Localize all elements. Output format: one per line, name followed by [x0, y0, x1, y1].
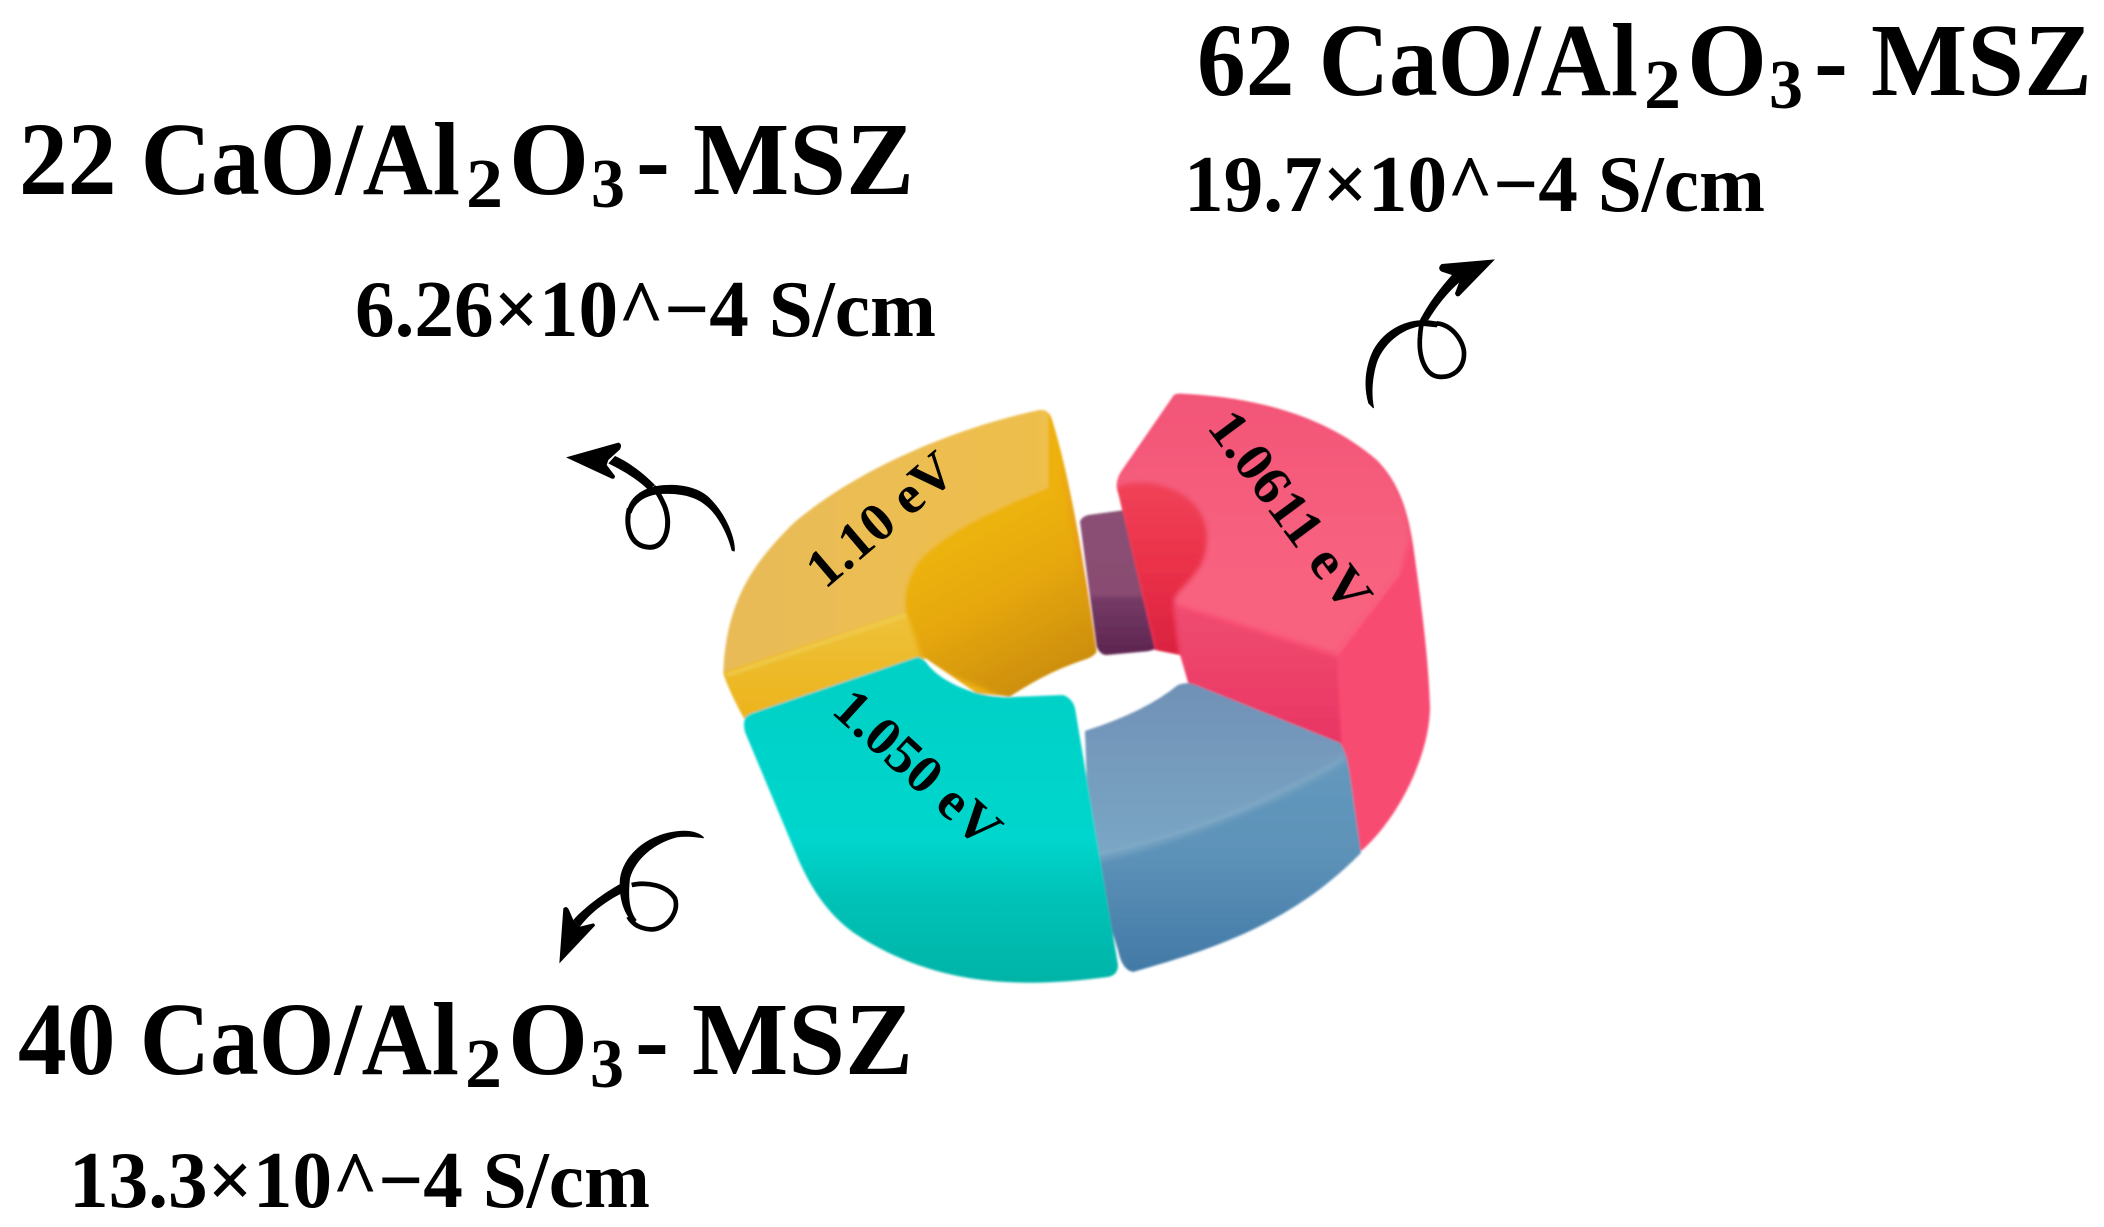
conductivity value: 62 CaO/Al2O3 - MSZ: 19.7×10^−4 S/cm — [1184, 141, 1765, 229]
heading: 22 CaO/Al2O3 - MSZ: 3 — [591, 146, 625, 223]
heading: 40 CaO/Al2O3 - MSZ: 3 — [590, 1026, 624, 1103]
heading: 22 CaO/Al2O3 - MSZ: O — [509, 102, 589, 217]
heading: 62 CaO/Al2O3 - MSZ: O — [1687, 3, 1767, 118]
conductivity value: 40 CaO/Al2O3 - MSZ: 13.3×10^−4 S/cm — [69, 1137, 650, 1225]
label: 1.10 eV: 1.10 eV — [794, 439, 967, 599]
heading: 62 CaO/Al2O3 - MSZ: - — [1814, 3, 1848, 118]
label: 1.050 eV: 1.050 eV — [822, 677, 1014, 859]
heading: 22 CaO/Al2O3 - MSZ: - — [636, 102, 670, 217]
heading: 62 CaO/Al2O3 - MSZ: 2 — [1644, 47, 1681, 124]
heading: 22 CaO/Al2O3 - MSZ: 22 CaO/Al — [19, 102, 460, 217]
heading: 40 CaO/Al2O3 - MSZ: 40 CaO/Al — [18, 982, 459, 1097]
heading: 22 CaO/Al2O3 - MSZ: 2 — [466, 146, 503, 223]
heading: 62 CaO/Al2O3 - MSZ: MSZ — [1871, 3, 2092, 118]
arrow: towards 62 CaO/Al2O3 - MSZ — [1366, 259, 1495, 408]
heading: 40 CaO/Al2O3 - MSZ — [18, 982, 913, 1103]
heading: 62 CaO/Al2O3 - MSZ: 3 — [1769, 47, 1803, 124]
heading: 22 CaO/Al2O3 - MSZ: MSZ — [693, 102, 914, 217]
heading: 40 CaO/Al2O3 - MSZ: O — [508, 982, 588, 1097]
segment: teal — [744, 657, 1118, 983]
segment: pink — [1110, 394, 1430, 851]
arrow: towards 40 CaO/Al2O3 - MSZ — [559, 831, 704, 963]
heading: 40 CaO/Al2O3 - MSZ: - — [635, 982, 669, 1097]
heading: 62 CaO/Al2O3 - MSZ — [1197, 3, 2092, 124]
segment: purple block — [1080, 509, 1162, 655]
heading: 22 CaO/Al2O3 - MSZ — [19, 102, 914, 223]
heading: 62 CaO/Al2O3 - MSZ: 62 CaO/Al — [1197, 3, 1638, 118]
segment: blue — [1085, 683, 1361, 972]
arrow: towards 22 CaO/Al2O3 - MSZ — [566, 443, 735, 552]
heading: 40 CaO/Al2O3 - MSZ: 2 — [465, 1026, 502, 1103]
segment: gold — [723, 410, 1100, 720]
heading: 40 CaO/Al2O3 - MSZ: MSZ — [692, 982, 913, 1097]
ring diagram — [723, 394, 1430, 983]
label: 1.0611 eV: 1.0611 eV — [1196, 398, 1385, 623]
conductivity value: 22 CaO/Al2O3 - MSZ: 6.26×10^−4 S/cm — [355, 266, 936, 354]
